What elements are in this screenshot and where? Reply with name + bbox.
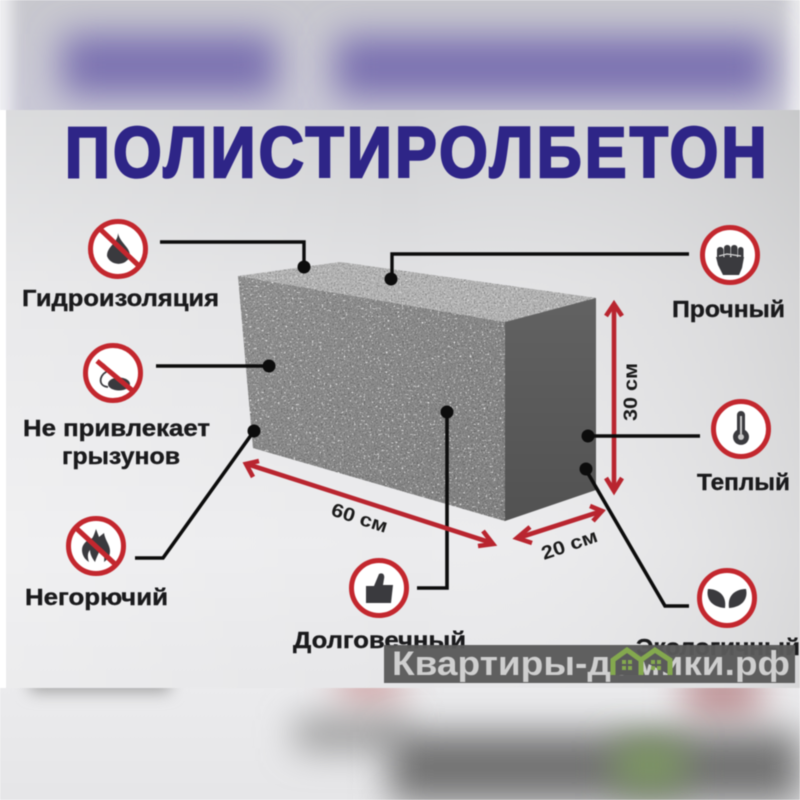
icon: no water: [90, 222, 146, 276]
dimension arrow: 30 cm: [606, 304, 622, 491]
leader line: warm: [582, 430, 700, 442]
icon: no fire: [68, 518, 124, 574]
label: warm: Теплый: [697, 469, 790, 495]
main image panel: [6, 110, 800, 688]
blurred bottom background band: [0, 688, 800, 800]
label: waterproofing: Гидроизоляция: [22, 285, 219, 311]
block top face: [240, 262, 596, 322]
icon: thumbs up: [352, 560, 406, 616]
leader line: ecological: [580, 462, 689, 606]
leader line: non-flammable: [135, 424, 260, 558]
title: ПОЛИСТИРОЛБЕТОН: [65, 114, 770, 193]
leader line: durable: [417, 406, 454, 588]
icon: thermometer: [714, 402, 768, 456]
label: strong: Прочный: [672, 296, 785, 322]
label: ecological: Экологичный: [636, 634, 800, 660]
label: non-flammable: Негорючий: [25, 584, 168, 610]
label: long-lasting: Долговечный: [293, 627, 466, 653]
label: 20 cm: 20 см: [539, 526, 600, 565]
block right face: [505, 298, 596, 521]
icon: leaves: [700, 570, 754, 626]
leader line: strong: [384, 254, 689, 286]
block front face: [238, 276, 506, 522]
leader line: rodents: [156, 360, 276, 372]
label: does not attract rodents: [23, 415, 210, 469]
blurred top background band: [0, 0, 800, 110]
leader line: water resistance: [160, 242, 310, 274]
icon: fist: [702, 228, 758, 282]
label: 60 cm: 60 см: [328, 500, 390, 538]
label: does not attract rodents: Не привлекает: [23, 415, 210, 441]
concrete block: [230, 255, 605, 530]
label: 30 cm: 30 см: [621, 363, 642, 421]
dimension arrow: 60 cm: [246, 461, 493, 546]
watermark bar: Квартиры-домики.рф: [392, 645, 790, 683]
label: does not attract rodents: грызунов: [62, 443, 180, 469]
dimension arrow: 20 cm: [517, 506, 602, 543]
icon: green houses: [613, 650, 670, 675]
icon: no rodents: [86, 346, 140, 400]
